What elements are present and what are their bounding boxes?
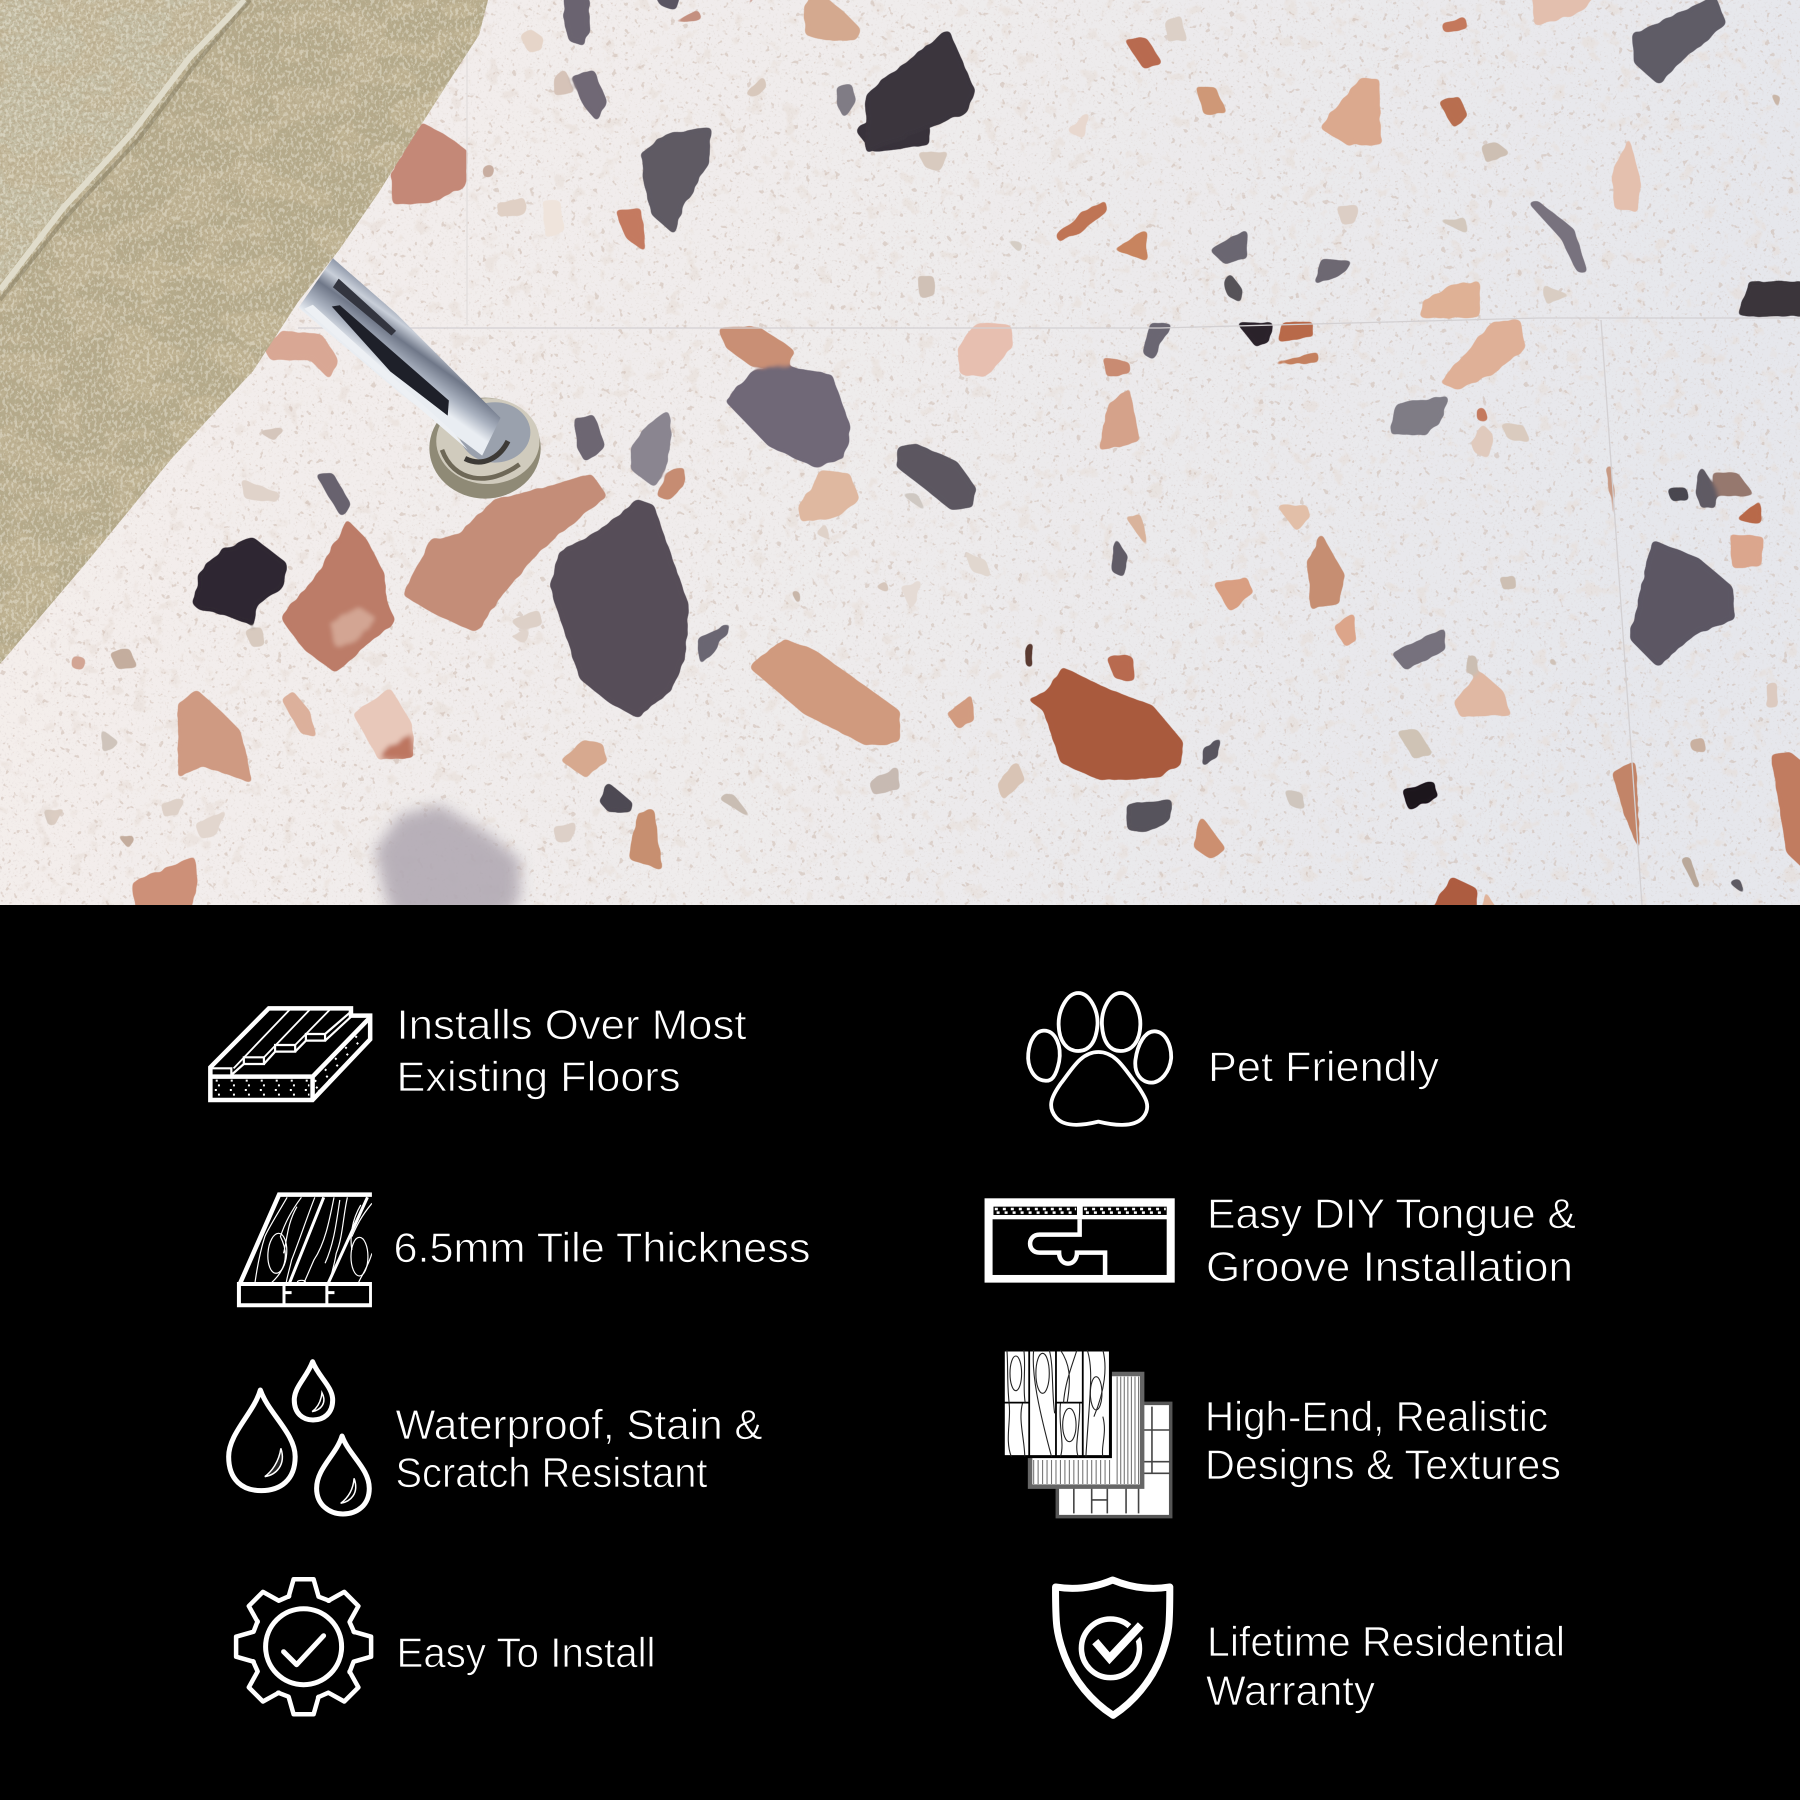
- text: easy DIY tongue and groove installation: Groove Installation: [1206, 1243, 1573, 1290]
- text: lifetime residential warranty: Lifetime Residential: [1207, 1618, 1565, 1665]
- fabric block texture: [0, 0, 500, 670]
- feature: waterproof: [229, 1362, 763, 1514]
- feature: tile thickness: [239, 1195, 810, 1305]
- floor base: [0, 0, 1800, 905]
- leg base plate: [429, 398, 541, 499]
- text: lifetime residential warranty: [1206, 1618, 1565, 1714]
- icon: shield with check: [1056, 1580, 1170, 1715]
- upholstered chair fabric: [0, 0, 500, 670]
- feature: tongue and groove: [985, 1190, 1576, 1290]
- shadow under cushion: [0, 0, 250, 300]
- text: easy DIY tongue and groove installation: [1206, 1190, 1576, 1290]
- large dark stone top centre: [866, 29, 975, 154]
- text: installs over most existing floors: [396, 1001, 747, 1100]
- left floor stones: [43, 0, 930, 923]
- fabric fine texture: [0, 0, 500, 670]
- fabric light weave: [0, 0, 500, 670]
- photo: terrazzo floor with chair: [0, 0, 1800, 923]
- text: installs over most existing floors: Installs Over Most: [396, 1001, 747, 1048]
- faint round stain on floor: [375, 805, 520, 920]
- feature: installs over most existing floors: [210, 1001, 747, 1100]
- chrome tube: [298, 258, 501, 456]
- text: pet friendly: Pet Friendly: [1208, 1043, 1439, 1090]
- icon: water drops: [229, 1362, 369, 1514]
- floor speckle texture: [0, 0, 1800, 905]
- icon: gear with check: [236, 1579, 371, 1714]
- floor small flecks: [0, 0, 1800, 905]
- icon: stacked texture swatches: [1003, 1350, 1171, 1517]
- dotted core: [215, 1081, 309, 1095]
- text: waterproof, stain and scratch resistant: Scratch Resistant: [396, 1449, 708, 1496]
- text: easy to install: Easy To Install: [396, 1629, 656, 1676]
- text: installs over most existing floors: Existing Floors: [396, 1053, 680, 1100]
- front wood swatch: [1003, 1350, 1110, 1457]
- text: high-end realistic designs and textures: High-End, Realistic: [1205, 1393, 1548, 1440]
- text: easy DIY tongue and groove installation: Easy DIY Tongue &: [1207, 1190, 1576, 1237]
- cushion seam: [0, 0, 245, 290]
- text: high-end realistic designs and textures: Designs & Textures: [1205, 1441, 1561, 1488]
- text: waterproof, stain and scratch resistant: Waterproof, Stain &: [396, 1401, 762, 1448]
- text: tile thickness: 6.5mm Tile Thickness: [394, 1224, 810, 1271]
- text: high-end realistic designs and textures: [1205, 1393, 1561, 1488]
- chair leg: [298, 258, 541, 499]
- icon: paw print: [1028, 993, 1171, 1125]
- feature: pet friendly: [1028, 993, 1439, 1125]
- text: waterproof, stain and scratch resistant: [396, 1401, 762, 1496]
- middle swatch: [1030, 1374, 1142, 1487]
- floor fine grain: [0, 0, 1800, 905]
- icon: wood plank cross-section: [239, 1195, 372, 1305]
- text: lifetime residential warranty: Warranty: [1206, 1667, 1375, 1714]
- icon: tongue and groove joint: [985, 1198, 1175, 1283]
- lighter cushion: [0, 0, 241, 284]
- tile seams: [298, 0, 1800, 905]
- feature: lifetime warranty: [1056, 1580, 1565, 1715]
- icon: layered floor block: [210, 1008, 370, 1100]
- right floor stones: [866, 0, 1800, 923]
- back swatch: [1057, 1403, 1171, 1517]
- feature: realistic designs: [1003, 1350, 1561, 1517]
- feature: easy to install: [236, 1579, 656, 1714]
